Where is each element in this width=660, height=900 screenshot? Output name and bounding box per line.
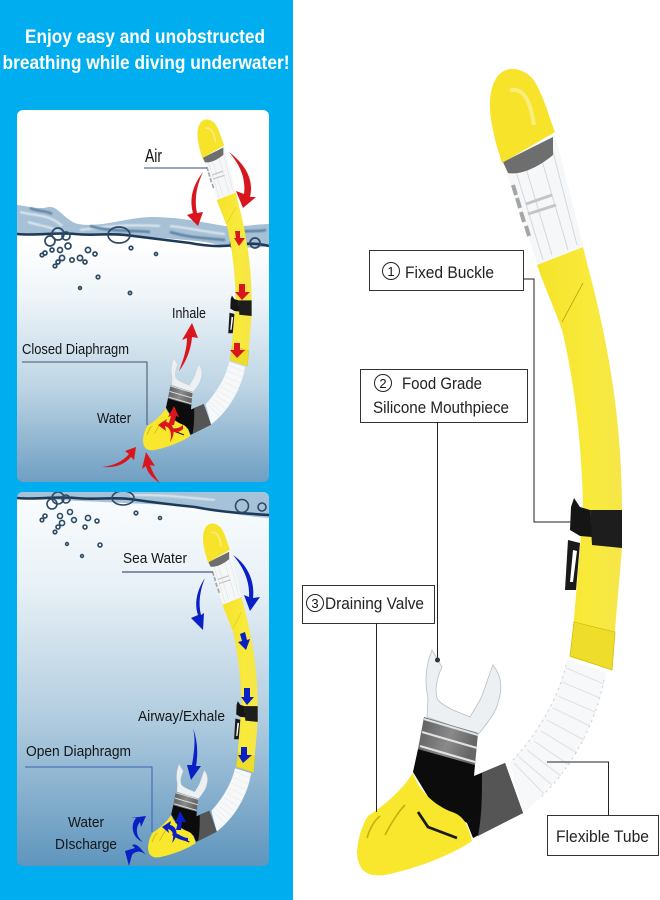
small snorkel, panel 1 — [143, 120, 252, 450]
callout: flexible tube: Flexible Tube — [556, 827, 649, 846]
black buckle clip — [565, 498, 622, 590]
callout: draining valve: 3 — [311, 596, 319, 611]
silicone mouthpiece — [426, 650, 501, 735]
grey neck — [418, 717, 478, 765]
blue left column — [0, 0, 293, 900]
water surface — [17, 491, 269, 557]
callout: food grade silicone mouthpiece: Food Grade — [402, 374, 482, 393]
labels: panel 2: Airway/Exhale — [138, 708, 225, 725]
large snorkel illustration — [357, 69, 622, 875]
heading — [2, 26, 290, 74]
labels: panel 2: Water — [68, 814, 104, 831]
heading: Enjoy easy and unobstructed — [25, 26, 265, 48]
labels: panel 1: Water — [97, 410, 131, 427]
small snorkel, panel 2 — [148, 524, 258, 857]
yellow diaphragm housing — [357, 773, 472, 875]
blue flow arrows — [125, 555, 260, 866]
clear upper tube — [502, 135, 583, 265]
heading: breathing while diving underwater! — [2, 52, 290, 74]
black elbow — [413, 749, 523, 838]
labels: panel 1 — [22, 146, 207, 427]
labels: panel 2: Open Diaphragm — [26, 743, 131, 760]
callout: food grade silicone mouthpiece: 2 — [379, 376, 387, 391]
callout: flexible tube — [547, 762, 658, 856]
callout: fixed buckle: 1 — [387, 264, 395, 279]
callout: fixed buckle: Fixed Buckle — [405, 263, 494, 282]
bubbles — [40, 491, 266, 557]
callout: draining valve — [302, 586, 434, 812]
yellow purge cap — [490, 69, 555, 163]
callout: food grade silicone mouthpiece — [360, 370, 528, 662]
callout: food grade silicone mouthpiece: Silicone Mouthpiece — [373, 398, 509, 417]
callout: draining valve: Draining Valve — [325, 594, 424, 613]
red flow arrows — [102, 152, 256, 483]
yellow rigid tube — [537, 247, 622, 670]
labels: panel 1: Closed Diaphragm — [22, 341, 129, 358]
labels: panel 2: Sea Water — [123, 550, 187, 567]
callout: fixed buckle — [370, 250, 572, 522]
panel: inhale above water — [17, 110, 269, 482]
bubbles — [40, 227, 260, 295]
water surface — [17, 205, 269, 295]
corrugated flexible tube — [510, 660, 606, 813]
panel: exhale under water — [17, 491, 269, 866]
labels: panel 1: Inhale — [172, 305, 206, 322]
labels: panel 1: Air — [145, 146, 162, 166]
labels: panel 2 — [25, 550, 225, 853]
labels: panel 2: DIscharge — [55, 836, 117, 853]
